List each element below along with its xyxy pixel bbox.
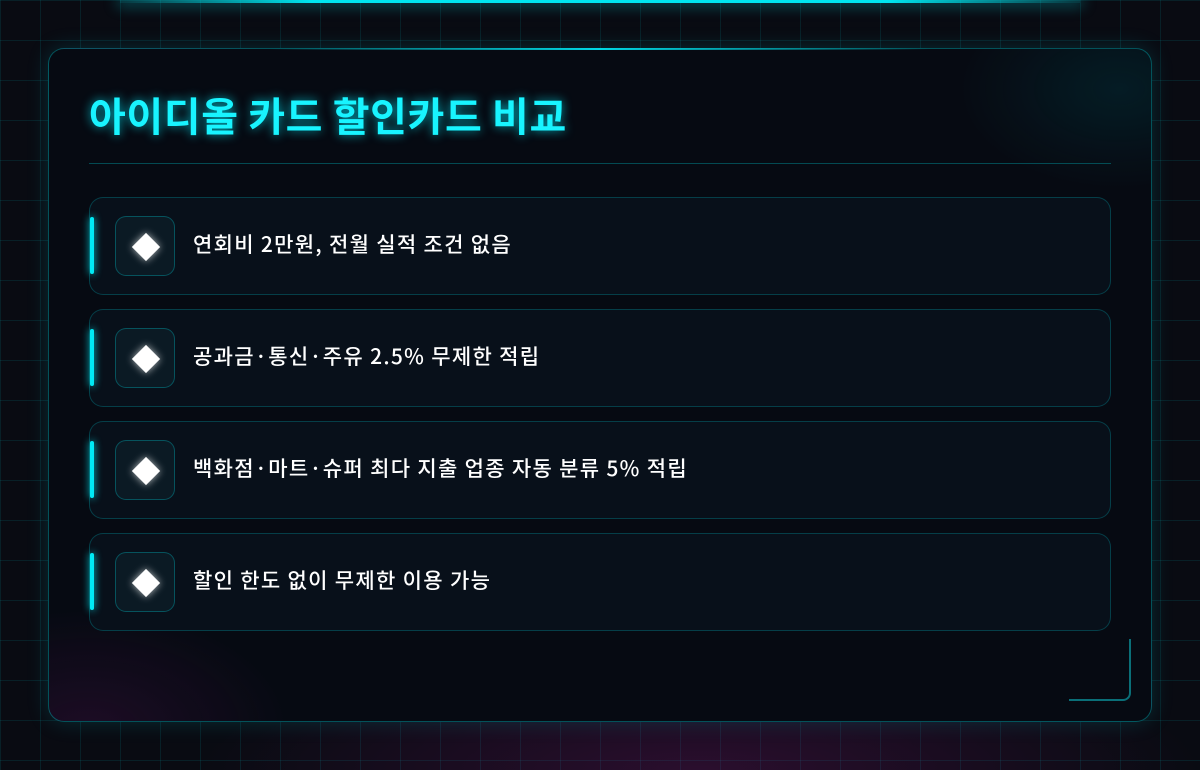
item 1: [89, 197, 1111, 295]
item 3: [89, 421, 1111, 519]
corner bracket: [1069, 639, 1131, 701]
icon: diamond: [115, 440, 175, 500]
item 4: [89, 533, 1111, 631]
icon: diamond: [115, 552, 175, 612]
text 3: 백화점·마트·슈퍼 최다 지출 업종 자동 분류 5% 적립: [193, 453, 688, 483]
icon: diamond: [115, 216, 175, 276]
text 2: 공과금·통신·주유 2.5% 무제한 적립: [193, 341, 540, 371]
text 4: 할인 한도 없이 무제한 이용 가능: [193, 565, 491, 595]
title: 아이디올 카드 할인카드 비교: [89, 85, 567, 143]
item 2: [89, 309, 1111, 407]
text 1: 연회비 2만원, 전월 실적 조건 없음: [193, 229, 512, 259]
icon: diamond: [115, 328, 175, 388]
